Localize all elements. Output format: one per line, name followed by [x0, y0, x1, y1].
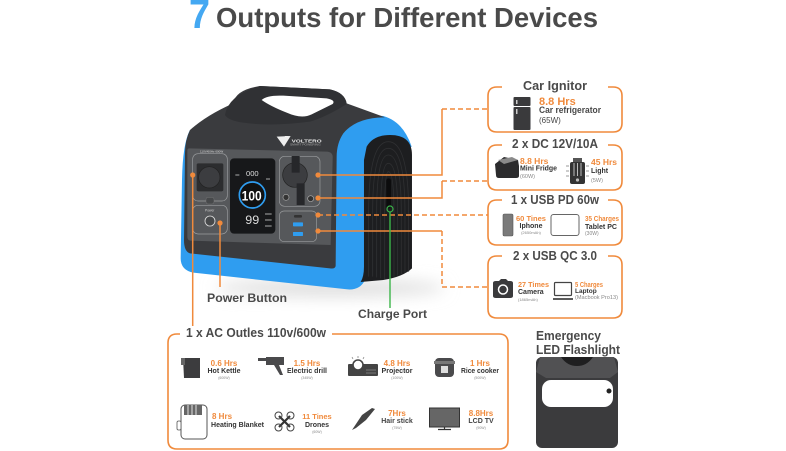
item: LCD TV: (90W) [476, 426, 486, 430]
callout line: USB QC [315, 228, 488, 287]
item: drones: 11 Tines [302, 412, 332, 421]
heading: flashlight: Emergency [536, 328, 602, 343]
panel: USB PD: (2650mAh) [521, 230, 542, 235]
item: rice cooker [434, 358, 499, 380]
item: projector [348, 356, 413, 380]
USB ports [279, 211, 317, 242]
callout line: USB PD [315, 212, 488, 218]
title: Outputs for Different Devices [216, 2, 598, 33]
icon: tablet [551, 214, 579, 236]
callout line: power button [219, 223, 221, 287]
item: projector: (100W) [391, 376, 403, 380]
callout line: charge port [387, 206, 393, 308]
panel: USB PD: Tablet PC [585, 222, 618, 231]
item: drill: 1.5 Hrs [294, 359, 321, 368]
item: projector: Projector [382, 368, 413, 375]
brand logo: SMART POWERING [290, 143, 321, 146]
panel: DC 12V [488, 136, 622, 190]
flashlight image [536, 357, 618, 448]
panel: USB QC [488, 248, 622, 318]
front panel [187, 148, 333, 245]
panel: USB PD: Iphone [520, 223, 543, 230]
heading: flashlight [536, 328, 621, 357]
item: kettle: (600W) [218, 376, 230, 380]
item: drill: Electric drill [287, 368, 327, 375]
panel: USB QC: 5 Charges [575, 282, 603, 289]
panel: USB QC: 2 x USB QC 3.0 [513, 248, 597, 263]
item: LCD TV: LCD TV [468, 418, 494, 425]
item: kettle: 0.6 Hrs [211, 359, 238, 368]
item: LCD TV: 8.8Hrs [469, 409, 494, 418]
item: rice cooker: (500W) [474, 376, 486, 380]
item: LCD TV [430, 408, 494, 430]
panel: DC 12V: (60W) [520, 174, 535, 180]
panel: car ignitor: (65W) [539, 116, 561, 125]
panel: USB PD: 60 Tines [516, 214, 546, 223]
panel: AC outlet: 1 x AC Outles 110v/600w [186, 325, 327, 340]
panel: USB QC: 27 Times [518, 280, 549, 289]
panel: DC 12V: Mini Fridge [520, 166, 557, 172]
handle [225, 86, 347, 124]
brand logo [277, 136, 322, 147]
panel: car ignitor [488, 78, 622, 132]
device shadow [215, 280, 445, 296]
LCD screen: 000 [246, 169, 259, 178]
callout line: AC outlet [192, 175, 194, 326]
blue frame [181, 116, 412, 289]
icon: laptop [553, 282, 573, 299]
panel: USB QC: Camera [518, 289, 544, 296]
brand logo: VOLTERO [292, 138, 322, 144]
item: drones: (60W) [312, 430, 322, 434]
panel: DC 12V: 8.8 Hrs [520, 156, 549, 166]
item: drill [258, 357, 327, 380]
label: charge port: Charge Port [358, 307, 427, 321]
item: hair stick: Hair stick [381, 418, 413, 425]
item: rice cooker: 1 Hrs [470, 359, 491, 368]
item: hair stick: (75W) [392, 426, 402, 430]
item: kettle: Hot Kettle [208, 368, 241, 375]
item: hair stick: 7Hrs [388, 409, 406, 418]
power button: Power [205, 209, 215, 213]
panel: DC 12V: 45 Hrs [591, 157, 617, 167]
LCD screen: 100 [242, 188, 262, 204]
panel: DC 12V: Light [591, 168, 609, 175]
AC socket: 110V/60Hz 600W [200, 150, 223, 154]
panel: USB PD [488, 192, 622, 245]
panel: USB PD: (30W) [585, 231, 599, 237]
handle opening [262, 96, 334, 116]
icon: light [566, 158, 589, 184]
icon: refrigerator [514, 97, 530, 130]
item: drones [275, 412, 332, 434]
panel: car ignitor: Car refrigerator [539, 105, 601, 115]
power button [193, 205, 227, 234]
item: projector: 4.8 Hrs [384, 359, 411, 368]
icon: mini fridge [495, 157, 519, 178]
item: heating blanket [177, 405, 265, 439]
item: drill: (345W) [301, 376, 313, 380]
panel: car ignitor: 8.8 Hrs [539, 96, 576, 108]
panel: car ignitor: Car Ignitor [523, 78, 587, 93]
panel: USB QC: (Macbook Pro13) [575, 295, 618, 301]
AC socket [193, 150, 227, 204]
label: power button: Power Button [207, 291, 287, 305]
panel: USB QC: (1865mAh) [518, 297, 538, 302]
item: rice cooker: Rice cooker [461, 368, 499, 375]
item: heating blanket: 8 Hrs [212, 412, 233, 421]
panel: USB PD: 1 x USB PD 60w [511, 192, 600, 207]
callout line: DC [315, 181, 488, 201]
panel: DC 12V: (5W) [591, 178, 603, 184]
heading: flashlight: LED Flashlight [536, 342, 621, 357]
item: drones: Drones [305, 422, 329, 429]
panel: USB QC: Laptop [575, 288, 597, 295]
icon: phone [503, 214, 513, 236]
LCD screen [230, 158, 275, 234]
side ventilation panel [361, 135, 412, 282]
item: hair stick [352, 408, 413, 430]
icon: camera [493, 279, 513, 298]
item: heating blanket: Heating Blanket [211, 422, 265, 429]
LCD screen: 99 [245, 213, 260, 227]
car ignitor and DC ports [279, 156, 320, 206]
panel: DC 12V: 2 x DC 12V/10A [512, 136, 599, 151]
top body and front [184, 86, 385, 269]
panel: USB PD: 35 Charges [585, 214, 619, 223]
callout line: car ignitor [315, 109, 488, 178]
power station product image [181, 86, 412, 289]
panel: AC outlet [168, 325, 508, 449]
item: kettle [181, 358, 241, 380]
